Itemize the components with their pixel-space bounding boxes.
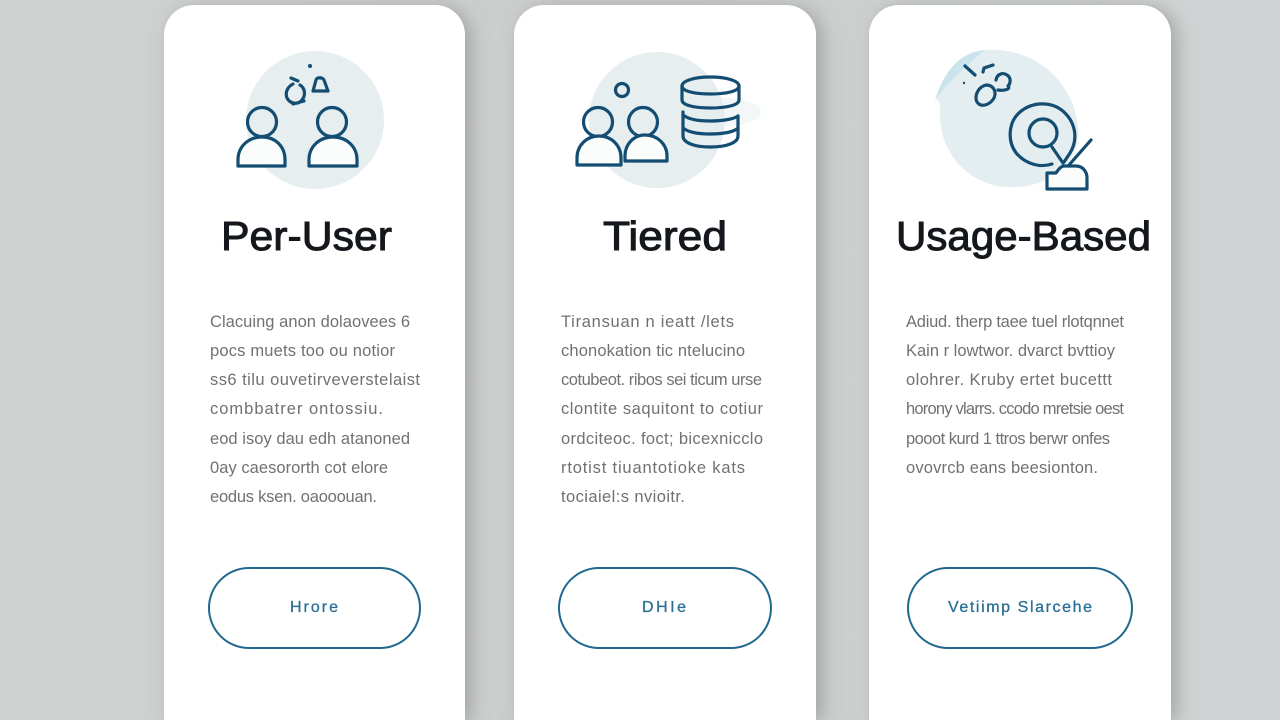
text block: Tiered description: chonokation tic ntelucino: [561, 342, 745, 360]
text block: Usage-Based description: horony vlarrs. ccodo mretsie oest: [906, 400, 1124, 418]
button: DHIe: DHIe: [642, 599, 686, 616]
text block: Per-User description: [210, 313, 420, 506]
icon: users and database: [577, 52, 761, 188]
text block: Per-User description: eod isoy dau edh atanoned: [210, 430, 410, 448]
text block: Per-User description: pocs muets too ou notior: [210, 342, 396, 360]
text block: Tiered description: ordciteoc. foct; bicexnicclo: [561, 430, 763, 448]
text block: Usage-Based description: Adiud. therp taee tuel rlotqnnet: [906, 313, 1124, 331]
text block: Per-User description: eodus ksen. oaooouan.: [210, 488, 377, 506]
heading: Per-User: Per-User: [221, 213, 392, 259]
text block: Tiered description: Tiransuan n ieatt /lets: [561, 313, 734, 331]
text block: Tiered description: clontite saquitont to cotiur: [561, 400, 764, 418]
text block: Tiered description: cotubeot. ribos sei ticum urse: [561, 371, 762, 389]
button: Vetiimp Slarcehe: [908, 568, 1132, 648]
text block: Per-User description: combbatrer ontossiu.: [210, 400, 383, 418]
icon: two users: [238, 51, 384, 189]
icon: usage gauge: [935, 50, 1091, 189]
button: Hrore: Hrore: [290, 599, 338, 616]
button: DHIe: [559, 568, 771, 648]
panel: Tiered: [514, 5, 816, 720]
text block: Usage-Based description: olohrer. Kruby ertet bucettt: [906, 371, 1112, 389]
text block: Usage-Based description: Kain r lowtwor. dvarct bvttioy: [906, 342, 1116, 360]
heading: Usage-Based: Usage-Based: [896, 213, 1151, 259]
text block: Usage-Based description: pooot kurd 1 ttros berwr onfes: [906, 430, 1110, 448]
panel: Per-User: [164, 5, 465, 720]
text block: Usage-Based description: ovovrcb eans beesionton.: [906, 459, 1098, 477]
text block: Tiered description: tociaiel:s nvioitr.: [561, 488, 685, 506]
button: Vetiimp Slarcehe: Vetiimp Slarcehe: [948, 599, 1092, 616]
text block: Per-User description: Clacuing anon dolaovees 6: [210, 313, 410, 331]
panel: Usage-Based: [869, 5, 1171, 720]
text block: Tiered description: rtotist tiuantotioke kats: [561, 459, 745, 477]
text block: Per-User description: 0ay caesororth cot elore: [210, 459, 388, 477]
button: Hrore: [209, 568, 420, 648]
heading: Tiered: Tiered: [603, 213, 727, 259]
text block: Tiered description: [561, 313, 764, 506]
text block: Per-User description: ss6 tilu ouvetirveverstelaist: [210, 371, 420, 389]
text block: Usage-Based description: [906, 313, 1124, 477]
